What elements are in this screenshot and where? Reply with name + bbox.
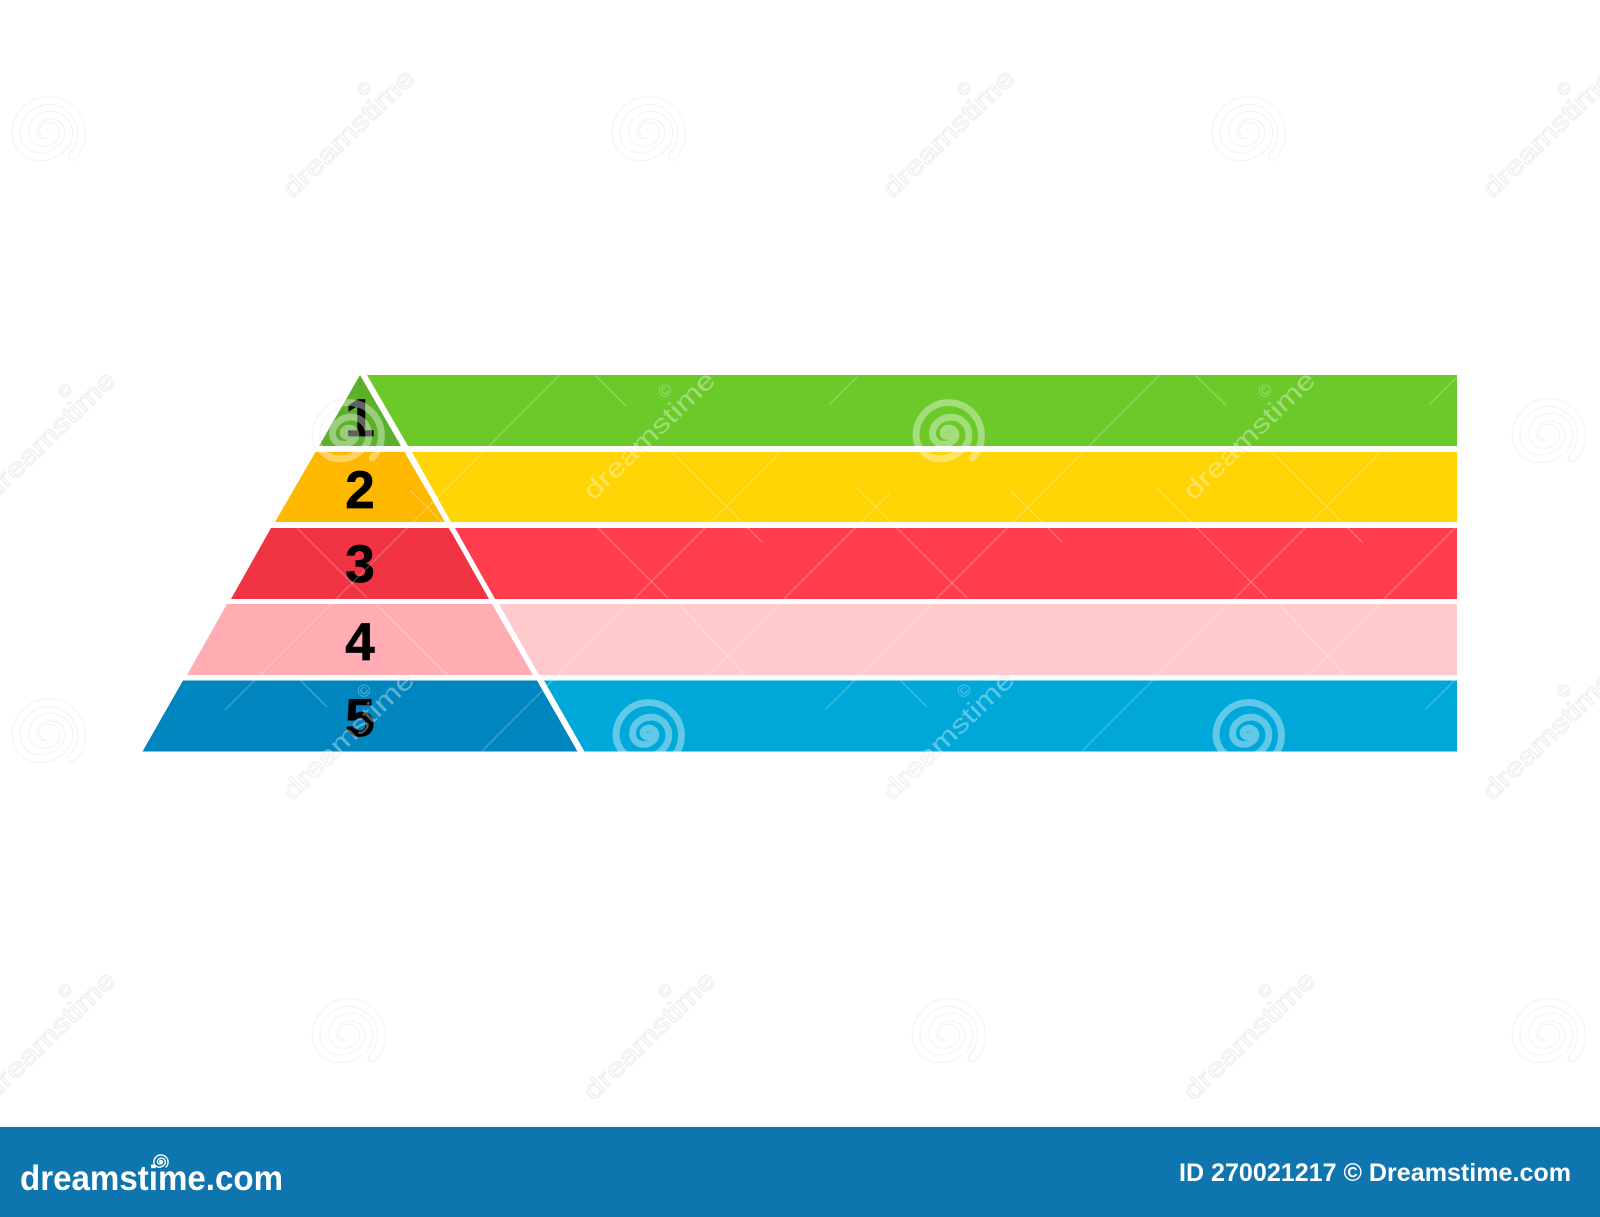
- watermark: faint outlines on white background: ©: [1553, 679, 1576, 702]
- number 5: 5: [345, 689, 375, 748]
- number 3: 3: [345, 535, 375, 594]
- watermark: faint outlines on white background: dreamstime: [876, 62, 1020, 204]
- watermark: faint outlines on white background: ©: [353, 77, 376, 100]
- watermark: faint outlines on white background: dreamstime: [1177, 964, 1321, 1106]
- watermark overlay: translucent white lines, spirals and wordmarks: [225, 354, 1600, 806]
- pyramid tier 1: green: [319, 375, 401, 446]
- watermark: faint outlines on white background: ©: [1254, 979, 1277, 1002]
- watermark: faint outlines on white background: dreamstime: [1476, 664, 1600, 806]
- watermark: faint outlines on white background: dreamstime: [276, 62, 420, 204]
- watermark: faint outlines on white background: ©: [654, 379, 677, 402]
- chart: pyramid with horizontal bars: [142, 375, 1457, 752]
- watermark: faint outlines on white background: dreamstime: [577, 964, 721, 1106]
- watermark overlay: translucent white lines, spirals and wordmarks: dreamstime: [1177, 364, 1321, 506]
- watermark: faint outlines on white background: dreamstime: [276, 664, 420, 806]
- watermark: faint outlines on white background: dreamstime: [1476, 62, 1600, 204]
- watermark: faint outlines on white background: dreamstime: [876, 664, 1020, 806]
- watermark: faint outlines on white background: ©: [353, 679, 376, 702]
- watermark overlay: translucent white lines, spirals and wordmarks: ©: [654, 379, 677, 402]
- pyramid tier 2: orange: [275, 452, 445, 522]
- watermark overlay: translucent white lines, spirals and wordmarks: ©: [353, 679, 376, 702]
- bar 2: yellow: [412, 452, 1457, 522]
- watermark: faint outlines on white background: ©: [54, 979, 77, 1002]
- bar 5: light blue: [544, 680, 1457, 752]
- numbers 1 to 5: [345, 389, 375, 748]
- watermark overlay: translucent white lines, spirals and wordmarks: dreamstime: [876, 664, 1020, 806]
- watermark: faint outlines on white background: ©: [54, 379, 77, 402]
- watermark: faint outlines on white background: ©: [1553, 77, 1576, 100]
- bar 4: light pink: [499, 604, 1457, 675]
- watermark: faint outlines on white background: dreamstime: [1177, 364, 1321, 506]
- pyramid tier 5: blue: [142, 680, 578, 752]
- watermark overlay: translucent white lines, spirals and wordmarks: ©: [1254, 379, 1277, 402]
- number 4: 4: [345, 613, 375, 672]
- watermark: faint outlines on white background: ©: [953, 679, 976, 702]
- pyramid tier 4: pink: [187, 604, 533, 675]
- number 1: 1: [345, 389, 375, 448]
- icon: logo spiral: [151, 1152, 171, 1172]
- watermark: faint outlines on white background: ©: [654, 979, 677, 1002]
- watermark overlay: translucent white lines, spirals and wordmarks: ©: [953, 679, 976, 702]
- footer logo wordmark: dreamstime.com: [20, 1159, 283, 1198]
- watermark overlay: translucent white lines, spirals and wordmarks: dreamstime: [577, 364, 721, 506]
- watermark: faint outlines on white background: ©: [1254, 379, 1277, 402]
- number 2: 2: [345, 461, 375, 520]
- bar 3: red: [455, 528, 1457, 599]
- watermark: faint outlines on white background: dreamstime: [577, 364, 721, 506]
- footer image id and credit: ID 270021217 © Dreamstime.com: [1179, 1159, 1571, 1187]
- bar 1: green: [367, 375, 1457, 446]
- watermark: faint outlines on white background: ©: [953, 77, 976, 100]
- footer bar: [0, 1127, 1600, 1217]
- pyramid tier 3: red: [231, 528, 489, 599]
- watermark overlay: translucent white lines, spirals and wordmarks: dreamstime: [276, 664, 420, 806]
